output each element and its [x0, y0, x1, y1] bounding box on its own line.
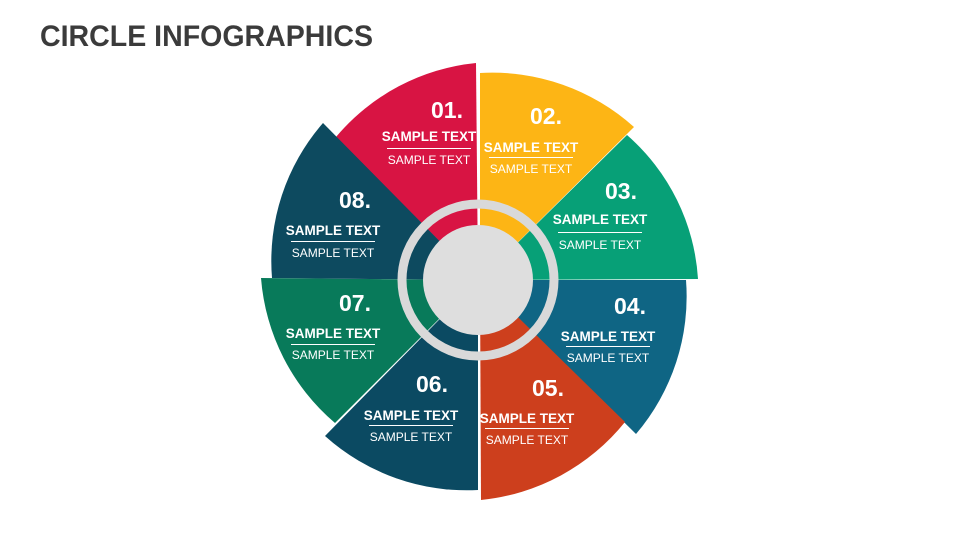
segment 01: 01. [431, 97, 463, 123]
segment 05: 05. [532, 375, 564, 401]
title: CIRCLE INFOGRAPHICS [40, 20, 373, 53]
segment 07 [261, 278, 478, 423]
segment 04 [480, 280, 687, 434]
segment 03: 03. [605, 178, 637, 204]
segment 06 [325, 280, 478, 490]
center ring [402, 204, 554, 356]
segment 07: 07. [339, 290, 371, 316]
segment 02: 02. [530, 103, 562, 129]
segment 01: SAMPLE TEXT [388, 153, 471, 167]
segment 06: SAMPLE TEXT [364, 408, 459, 423]
segment 08 [271, 123, 478, 280]
segment 06: 06. [416, 371, 448, 397]
center circle [423, 225, 533, 335]
segment 05: SAMPLE TEXT [480, 411, 575, 426]
segment 04: SAMPLE TEXT [561, 329, 656, 344]
segment 07: SAMPLE TEXT [286, 326, 381, 341]
segment 05 [480, 280, 625, 500]
segment 08: SAMPLE TEXT [292, 246, 375, 260]
segment 08: 08. [339, 187, 371, 213]
segment 02 [480, 73, 634, 280]
segment 04: 04. [614, 293, 646, 319]
segment 06: SAMPLE TEXT [370, 430, 453, 444]
segment 02: SAMPLE TEXT [490, 162, 573, 176]
circle diagram [261, 63, 698, 500]
segment 03: SAMPLE TEXT [559, 238, 642, 252]
segment 01: SAMPLE TEXT [382, 129, 477, 144]
segment 02: SAMPLE TEXT [484, 140, 579, 155]
segment 08: SAMPLE TEXT [286, 223, 381, 238]
segment 05: SAMPLE TEXT [486, 433, 569, 447]
segment 01 [336, 63, 478, 280]
segment 03 [480, 135, 698, 280]
segment 07: SAMPLE TEXT [292, 348, 375, 362]
segment 03: SAMPLE TEXT [553, 212, 648, 227]
segment 04: SAMPLE TEXT [567, 351, 650, 365]
